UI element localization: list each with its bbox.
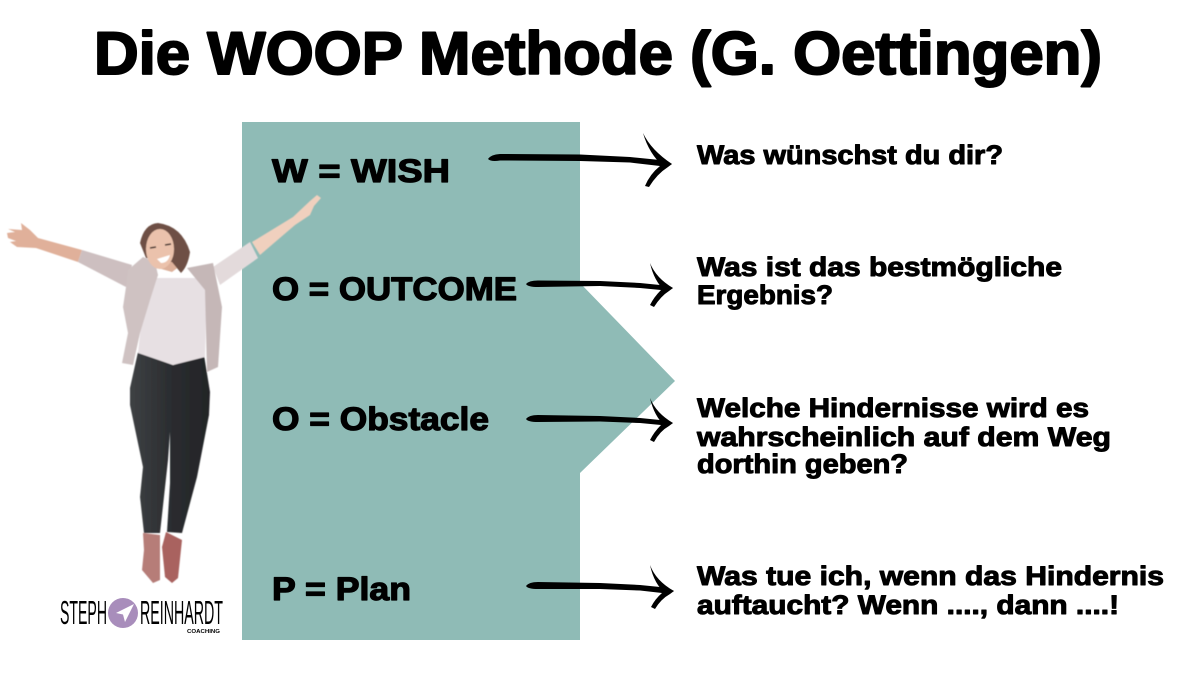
label: obstacle: O = Obstacle (272, 401, 489, 437)
logo: Steph Reinhardt Coaching: STEPH (60, 594, 107, 631)
shirt (138, 278, 207, 365)
text: outcome question: Was ist das bestmögliche (697, 252, 1062, 282)
text: plan question: Was tue ich, wenn das Hindernis (697, 561, 1164, 591)
text: REINHARDT (140, 594, 223, 631)
right arm and hand (252, 195, 321, 255)
hair (140, 223, 190, 273)
logo subtitle: COACHING (187, 629, 220, 635)
arrow: obstacle (526, 398, 673, 442)
text: outcome question: Ergebnis? (697, 280, 833, 310)
left shoe (142, 533, 160, 583)
left arm and hand (7, 223, 82, 262)
face (146, 229, 174, 269)
person: jumping woman (7, 195, 321, 583)
left sleeve (78, 250, 132, 287)
eyes (150, 244, 171, 248)
neck (158, 255, 184, 272)
title: Die WOOP Methode (G. Oettingen) (94, 20, 1102, 87)
text: obstacle question: Welche Hindernisse wird es (697, 393, 1089, 423)
jeans (130, 352, 210, 533)
text: obstacle question: dorthin geben? (697, 449, 908, 479)
text: outcome question (697, 252, 1062, 310)
text: obstacle question: wahrscheinlich auf dem Weg (696, 422, 1111, 452)
text: obstacle question (696, 393, 1111, 479)
right shoe (162, 532, 182, 583)
smile (157, 255, 170, 263)
logo badge (108, 598, 138, 628)
label: outcome: O = OUTCOME (272, 271, 517, 307)
left jacket panel (122, 257, 158, 365)
text: plan question: auftaucht? Wenn ...., dann ....! (697, 590, 1119, 620)
right sleeve (213, 242, 258, 285)
label: wish: W = WISH (272, 153, 450, 189)
label: plan: P = Plan (272, 571, 411, 607)
arrow: plan (526, 565, 674, 609)
logo: Steph Reinhardt Coaching (60, 594, 223, 635)
arrow: outcome (526, 263, 673, 307)
text: wish question: Was wünschst du dir? (697, 140, 1003, 170)
text: plan question (697, 561, 1164, 620)
panel: teal arrow shape (242, 122, 675, 640)
right jacket panel (187, 263, 222, 372)
logo paper plane (116, 604, 134, 622)
arrow: wish (488, 133, 672, 187)
